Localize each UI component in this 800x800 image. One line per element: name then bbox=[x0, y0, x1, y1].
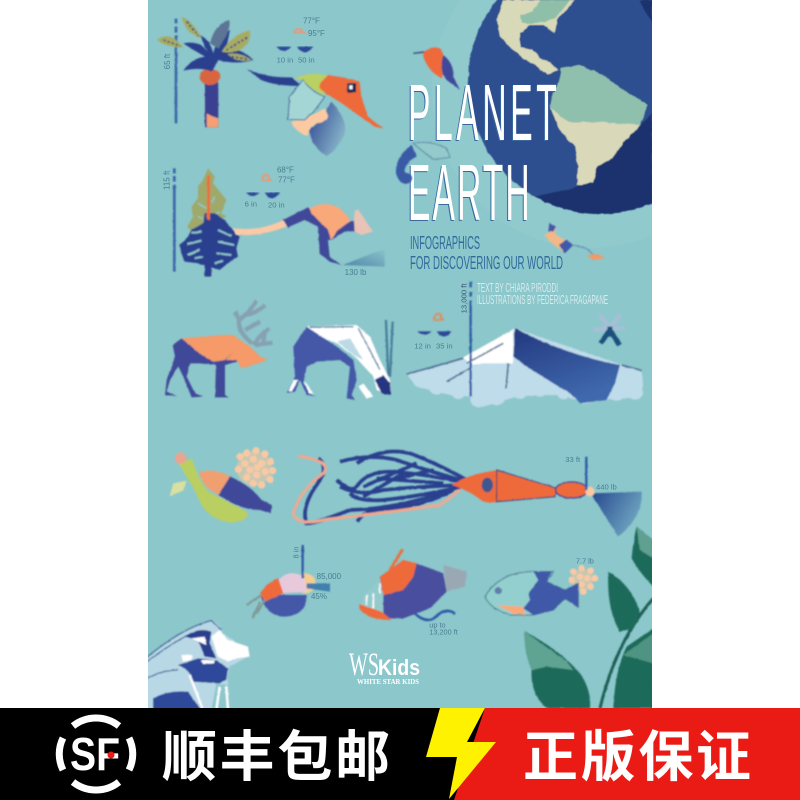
wing bbox=[288, 80, 325, 120]
temperature labels bbox=[277, 166, 295, 185]
antlers bbox=[235, 301, 273, 345]
south america bbox=[550, 65, 648, 185]
rain icons bbox=[276, 47, 313, 52]
trunk bbox=[205, 80, 218, 127]
piranha drawing bbox=[485, 565, 598, 615]
banner text: free shipping: 顺丰包邮 bbox=[162, 712, 390, 792]
shrimp drawing bbox=[247, 545, 330, 618]
body bbox=[283, 207, 356, 265]
title line 2: EARTH bbox=[408, 148, 532, 238]
peach circle bbox=[296, 573, 316, 593]
eggs bbox=[568, 565, 598, 595]
palm drawing bbox=[157, 17, 253, 127]
outline bbox=[413, 142, 450, 159]
depth labels: 13,200 ft bbox=[429, 627, 458, 636]
depth labels: up to bbox=[429, 620, 446, 629]
upper foliage gaps bbox=[198, 197, 220, 220]
top leaf bbox=[632, 527, 653, 587]
trunk bbox=[205, 213, 211, 277]
temperature icon bbox=[433, 314, 444, 320]
stem bbox=[600, 598, 653, 708]
panel: anglerfish bbox=[359, 549, 467, 636]
foam streaks bbox=[211, 683, 231, 710]
banner red section bbox=[454, 708, 800, 800]
teeth bbox=[367, 583, 380, 608]
title: planet earth bbox=[408, 68, 560, 238]
second leaf bbox=[608, 572, 640, 632]
logo: ws kids bbox=[349, 647, 420, 686]
lower foliage bbox=[180, 213, 240, 270]
panel: araucaria climate bbox=[245, 166, 295, 209]
flipper bbox=[169, 481, 187, 496]
body bbox=[544, 223, 573, 253]
prey bbox=[587, 254, 605, 260]
snow cap bbox=[463, 329, 513, 365]
weight label: 7.7 lb bbox=[576, 556, 594, 565]
white foam bbox=[181, 630, 250, 664]
wing bbox=[548, 223, 573, 253]
shell bbox=[200, 471, 231, 495]
height label: 13,000 ft bbox=[460, 283, 469, 313]
panel: araucaria tree bbox=[163, 168, 240, 277]
head bbox=[175, 453, 186, 464]
temperature labels: 95°F bbox=[308, 29, 325, 38]
panel: kangaroo bbox=[233, 204, 385, 277]
weight label: 130 lb bbox=[345, 268, 367, 277]
back bbox=[295, 74, 328, 96]
logo: sf express bbox=[59, 718, 133, 790]
face bbox=[375, 375, 391, 395]
squid drawing bbox=[293, 451, 642, 537]
height label: 115 ft bbox=[163, 170, 172, 190]
legs bbox=[247, 595, 265, 618]
panel: reindeer bbox=[165, 301, 273, 397]
feeding tentacle bbox=[293, 456, 460, 522]
panel: giant squid bbox=[293, 451, 642, 537]
panel: turtle bbox=[169, 447, 276, 523]
egg mass bbox=[237, 451, 271, 486]
icon: snowflake bbox=[593, 315, 625, 345]
legs and belly bbox=[165, 338, 237, 397]
head bbox=[354, 209, 373, 235]
peach fin tip bbox=[585, 487, 595, 496]
cover background bbox=[148, 0, 652, 708]
book cover bbox=[148, 0, 652, 708]
height bar bbox=[173, 18, 179, 124]
subtitle line 2: FOR DISCOVERING OUR WORLD bbox=[410, 253, 563, 273]
rain labels: 20 in bbox=[268, 200, 285, 209]
kangaroo drawing bbox=[233, 204, 385, 267]
head bbox=[452, 471, 497, 503]
fourth leaf bbox=[613, 628, 653, 708]
subtitle bbox=[410, 233, 563, 273]
grey frond bbox=[210, 20, 230, 48]
eggs bbox=[235, 447, 276, 489]
fruit bunch bbox=[200, 68, 220, 85]
lure bbox=[390, 549, 403, 570]
mantle bbox=[497, 470, 557, 502]
lower body bbox=[261, 595, 307, 617]
upper foliage bbox=[187, 168, 226, 232]
tail bbox=[572, 245, 593, 255]
rain labels: 10 in bbox=[277, 56, 293, 65]
globe halo bbox=[432, 0, 748, 248]
rain labels: 12 in bbox=[414, 341, 431, 350]
logo wordmark: WS bbox=[349, 647, 379, 683]
panel: piranha bbox=[485, 556, 598, 615]
orange spine bbox=[207, 175, 210, 220]
back stripes bbox=[310, 327, 380, 370]
pale patch bbox=[337, 338, 363, 360]
logo ring bbox=[59, 718, 133, 790]
mouth bbox=[361, 578, 383, 615]
count label: 85,000 bbox=[317, 572, 342, 581]
globe ocean bbox=[467, 0, 652, 214]
head and chest bbox=[320, 75, 383, 128]
rain labels: 35 in bbox=[436, 341, 453, 350]
white legs bbox=[288, 380, 373, 398]
tail fin bbox=[443, 565, 467, 592]
fin bbox=[556, 482, 588, 498]
height label: 8 in bbox=[291, 547, 300, 558]
subtitle line 1: INFOGRAPHICS bbox=[410, 233, 480, 253]
mountain drawing bbox=[407, 282, 643, 407]
navy swell bbox=[178, 658, 228, 683]
wave lines bbox=[145, 621, 221, 680]
depth wave bbox=[415, 611, 455, 620]
orange head bbox=[260, 578, 283, 602]
body bbox=[485, 572, 578, 615]
banner background bbox=[0, 708, 800, 800]
height label: 65 ft bbox=[163, 53, 172, 69]
logo dot bbox=[108, 752, 114, 758]
temperature labels: 77°F bbox=[278, 176, 295, 185]
panel: shrimp bbox=[247, 545, 342, 618]
credits bbox=[477, 281, 608, 307]
icon: lightning bolt bbox=[426, 708, 496, 799]
temperature labels: 77°F bbox=[303, 16, 320, 25]
orange back bbox=[182, 335, 267, 368]
anglerfish drawing bbox=[359, 549, 467, 620]
navy crest bbox=[185, 630, 216, 658]
wave body bbox=[145, 620, 248, 710]
top leaf highlight bbox=[637, 527, 653, 558]
rain labels bbox=[245, 200, 285, 209]
horns bbox=[386, 320, 393, 377]
eye bbox=[347, 83, 356, 93]
icon: small bird bbox=[544, 223, 605, 260]
temperature labels: 68°F bbox=[277, 166, 294, 175]
body bbox=[423, 47, 447, 78]
tail bbox=[233, 219, 286, 235]
egg mass bbox=[572, 569, 593, 591]
head bbox=[380, 560, 417, 595]
rain labels: 6 in bbox=[245, 200, 257, 209]
white body bbox=[307, 325, 391, 395]
rain labels bbox=[277, 57, 314, 62]
temperature icon bbox=[294, 29, 307, 33]
cloud scallops bbox=[413, 373, 643, 407]
weight fan bbox=[591, 492, 642, 537]
back bbox=[310, 204, 350, 240]
body bbox=[178, 458, 247, 523]
yellow fronds bbox=[157, 17, 252, 61]
book cover: ILLUSTRATIONS BY FEDERICA FRAGAPANE bbox=[477, 293, 608, 307]
third leaf highlight bbox=[525, 632, 573, 670]
icon: red bird bbox=[413, 47, 460, 90]
temperature labels bbox=[303, 18, 325, 36]
south america south bbox=[550, 107, 640, 185]
tail bbox=[246, 69, 302, 86]
panel: palm tree bbox=[157, 17, 253, 127]
trunk base bbox=[207, 113, 218, 127]
foliage gaps bbox=[187, 230, 234, 263]
title line 1: PLANET bbox=[408, 68, 560, 158]
weight label: 440 lb bbox=[596, 482, 617, 491]
third leaf bbox=[525, 632, 590, 708]
length label: 33 ft bbox=[565, 455, 581, 464]
tree drawing bbox=[174, 168, 240, 277]
rain icons bbox=[246, 193, 280, 198]
belly bbox=[497, 605, 525, 615]
belly bbox=[291, 108, 328, 136]
tail curl bbox=[396, 145, 417, 184]
panel: palm climate bbox=[276, 16, 325, 65]
fan chart bbox=[307, 583, 330, 592]
jaw bbox=[359, 604, 392, 620]
panel: wave bbox=[145, 620, 250, 710]
weight fan bbox=[343, 248, 385, 267]
north america forest bbox=[520, 0, 570, 24]
foam lines bbox=[190, 675, 228, 710]
icon: chameleon bbox=[396, 142, 450, 184]
eye bbox=[495, 587, 502, 594]
height bar bbox=[299, 545, 306, 578]
credit text: TEXT BY CHIARA PIRODDI bbox=[477, 281, 558, 295]
logo kids: Kids bbox=[378, 655, 420, 680]
ridge lines bbox=[407, 343, 642, 388]
navy body bbox=[287, 327, 357, 400]
dark fronds bbox=[183, 30, 253, 72]
brain bbox=[278, 573, 307, 593]
panel: oryx bbox=[287, 320, 393, 400]
height bar bbox=[467, 282, 474, 397]
tentacles bbox=[305, 451, 467, 523]
body bbox=[380, 563, 447, 618]
height bar bbox=[172, 168, 177, 272]
banner text: authentic guarantee: 正版保证 bbox=[523, 712, 751, 792]
panel: mountain bbox=[407, 282, 643, 407]
frond flecks bbox=[163, 22, 248, 59]
logo subline: WHITE STAR KIDS bbox=[357, 677, 419, 686]
north america bbox=[497, 0, 575, 75]
panel: parrot bbox=[246, 69, 383, 156]
depth labels bbox=[429, 620, 458, 636]
globe bbox=[467, 0, 652, 215]
navy slope bbox=[513, 328, 620, 403]
length bar bbox=[583, 457, 590, 490]
temperature icon bbox=[262, 174, 272, 181]
beak bbox=[413, 52, 425, 53]
motion fan bbox=[309, 102, 345, 156]
panel: leaves bbox=[525, 527, 653, 708]
mountain base bbox=[407, 328, 643, 407]
rain labels: 50 in bbox=[298, 56, 315, 65]
wing bbox=[441, 55, 460, 90]
navy rear bbox=[523, 572, 578, 615]
eye highlight bbox=[349, 85, 353, 89]
logo letters: SF bbox=[70, 728, 120, 780]
rain icons bbox=[417, 331, 452, 336]
navy shell bbox=[218, 477, 272, 513]
deep ocean bbox=[533, 0, 652, 220]
percent label: 45% bbox=[311, 592, 327, 601]
fourth leaf highlight bbox=[623, 633, 653, 663]
eye bbox=[482, 478, 493, 492]
lower navy bbox=[153, 691, 201, 710]
rain labels bbox=[414, 341, 453, 350]
